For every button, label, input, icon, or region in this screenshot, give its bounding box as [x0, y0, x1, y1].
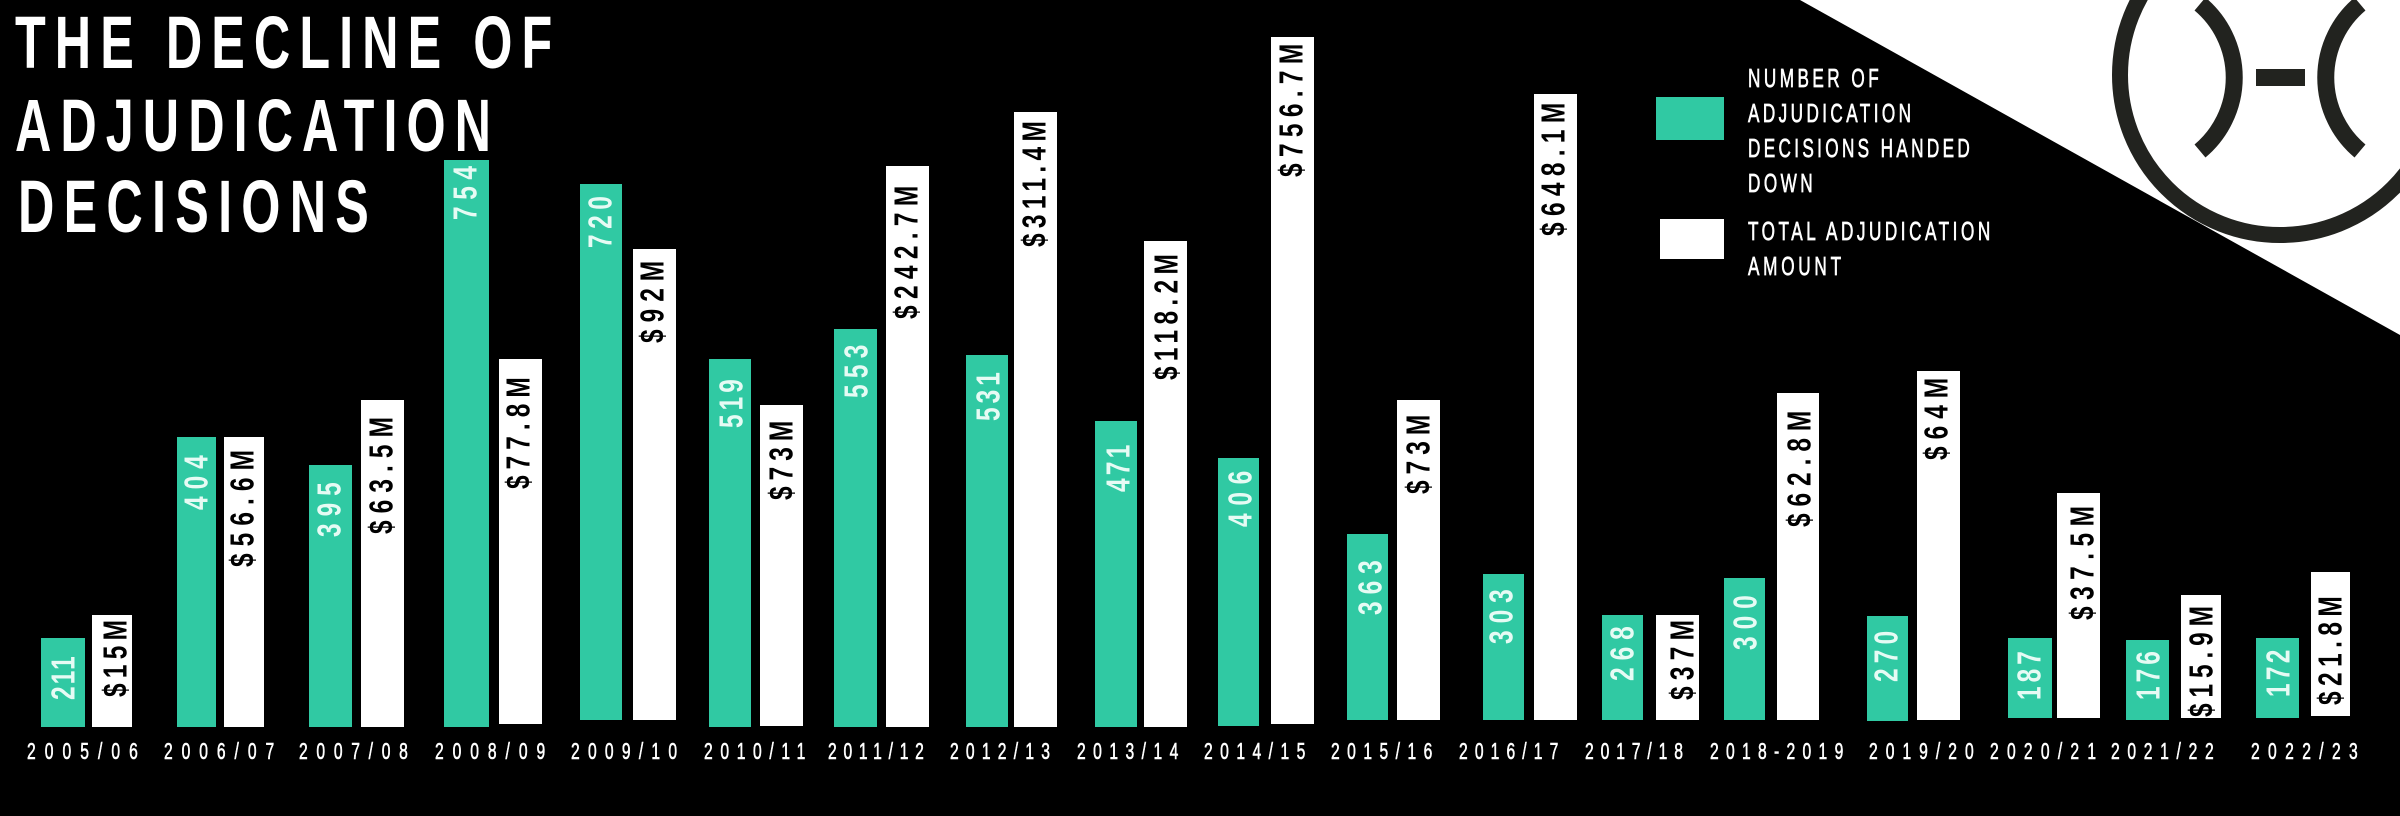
amount bar: $648.1M [1534, 94, 1577, 720]
year label: 2017/18 [1585, 739, 1683, 765]
year label: 2021/22 [2111, 739, 2214, 765]
decisions bar: 172: 172 [2261, 650, 2297, 697]
amount bar: $756.7M: $756.7M [1274, 44, 1310, 177]
year label: 2013/14 [1077, 739, 1178, 765]
year label: 2005/06 [27, 739, 138, 765]
amount bar: $73M [760, 405, 803, 726]
decisions bar: 471 [1095, 421, 1137, 727]
decisions bar: 187: 187 [2012, 651, 2048, 700]
year label: 2006/07 [164, 739, 274, 765]
title: DECISIONS [18, 167, 369, 248]
year group: 2015/16 [1331, 400, 1440, 765]
amount bar: $73M: $73M [764, 421, 800, 500]
amount bar: $64M [1917, 371, 1960, 720]
decisions bar: 406: 406 [1223, 471, 1259, 527]
amount bar: $63.5M: $63.5M [364, 417, 400, 534]
decisions bar: 720 [580, 184, 622, 720]
amount bar: $756.7M [1271, 37, 1314, 724]
title: ADJUDICATION [15, 86, 491, 167]
decisions bar: 300: 300 [1728, 595, 1764, 650]
decisions bar: 404: 404 [179, 455, 215, 510]
amount bar: $242.7M [886, 166, 929, 727]
decisions bar: 404 [177, 437, 216, 727]
decisions bar: 363 [1347, 534, 1389, 720]
year group: 2019/20 [1867, 371, 1974, 765]
amount bar: $62.8M: $62.8M [1782, 411, 1818, 527]
year group: 2007/08 [299, 400, 408, 765]
year label: 2014/15 [1204, 739, 1305, 765]
year label: 2012/13 [950, 739, 1050, 765]
year label: 2018-2019 [1710, 739, 1843, 765]
title: THE DECLINE OF [15, 3, 552, 84]
year label: 2007/08 [299, 739, 408, 765]
decisions bar: 471: 471 [1101, 445, 1137, 492]
year group: 2020/21 [1990, 493, 2101, 765]
legend item: total amount [1660, 216, 1990, 281]
year label: 2009/10 [571, 739, 677, 765]
decisions bar: 553: 553 [839, 345, 875, 398]
amount bar: $118.2M: $118.2M [1149, 254, 1185, 380]
decisions bar: 303 [1483, 574, 1524, 720]
amount bar: $56.6M [224, 437, 264, 727]
decisions bar: 211 [41, 638, 85, 727]
amount bar: $311.4M: $311.4M [1017, 121, 1053, 247]
amount bar: $64M: $64M [1919, 378, 1955, 460]
year label: 2010/11 [704, 739, 805, 765]
decisions bar: 176 [2126, 640, 2169, 720]
amount bar: $77.8M: $77.8M [501, 377, 537, 489]
amount bar: $15M: $15M [98, 620, 134, 697]
amount bar: $21.8M: $21.8M [2313, 596, 2349, 705]
amount bar: $92M [633, 249, 676, 720]
amount bar: $62.8M [1777, 393, 1819, 720]
decisions bar: 531: 531 [971, 372, 1007, 421]
amount bar: $77.8M [499, 359, 542, 724]
decisions bar: 270 [1867, 616, 1908, 721]
title [15, 3, 552, 248]
year group: 2010/11 [704, 359, 805, 765]
decisions bar: 172 [2256, 638, 2299, 718]
year label: 2022/23 [2251, 739, 2358, 765]
year group: 2012/13 [950, 112, 1057, 765]
amount bar: $63.5M [361, 400, 404, 727]
legend item: number of decisions: DECISIONS HANDED [1748, 133, 1970, 163]
decisions bar: 303: 303 [1484, 589, 1520, 644]
legend [1656, 63, 1990, 281]
amount bar: $311.4M [1014, 112, 1057, 727]
decisions bar: 720: 720 [583, 196, 619, 248]
decisions bar: 395 [309, 465, 352, 727]
amount bar: $73M [1397, 400, 1440, 720]
decisions bar: 395: 395 [312, 482, 348, 537]
year label: 2016/17 [1459, 739, 1558, 765]
year group: 2011/12 [828, 166, 929, 765]
year label: 2015/16 [1331, 739, 1432, 765]
legend item: number of decisions: DOWN [1748, 168, 1813, 198]
amount bar: $92M: $92M [635, 261, 671, 343]
decisions bar: 176: 176 [2131, 651, 2167, 700]
amount bar: $37.5M [2057, 493, 2101, 718]
year label: 2011/12 [828, 739, 924, 765]
decisions bar: 754 [444, 160, 489, 727]
amount bar: $73M: $73M [1401, 415, 1437, 494]
decisions bar: 268: 268 [1605, 626, 1641, 681]
decisions bar: 531 [966, 355, 1008, 727]
legend item: number of decisions [1656, 63, 1970, 198]
corner panel with logo [1800, 0, 2400, 335]
year group: 2022/23 [2251, 572, 2358, 765]
year group: 2014/15 [1204, 37, 1314, 765]
amount bar: $118.2M [1144, 241, 1187, 727]
amount bar: $37M: $37M [1665, 620, 1701, 700]
year group: 2017/18 [1585, 615, 1701, 765]
decisions bar: 754: 754 [448, 166, 484, 220]
year group: 2005/06 [27, 615, 138, 765]
decisions bar: 268 [1602, 615, 1643, 720]
amount bar: $648.1M: $648.1M [1536, 103, 1572, 236]
decisions bar: 519 [709, 359, 751, 727]
decisions bar: 553 [834, 329, 877, 727]
year label: 2008/09 [435, 739, 545, 765]
amount bar: $37M [1656, 615, 1701, 720]
year group: 2021/22 [2111, 595, 2221, 765]
amount bar: $15M [92, 615, 134, 727]
legend item: total amount: TOTAL ADJUDICATION [1748, 216, 1990, 246]
legend item: number of decisions: ADJUDICATION [1748, 98, 1911, 128]
amount bar: $242.7M: $242.7M [889, 186, 925, 319]
legend item: total amount: AMOUNT [1748, 251, 1841, 281]
year group: 2013/14 [1077, 241, 1187, 765]
amount bar: $15.9M: $15.9M [2184, 606, 2220, 717]
year group: 2016/17 [1459, 94, 1577, 765]
decisions bar: 406 [1218, 458, 1259, 726]
year group: 2018-2019 [1710, 393, 1843, 765]
year group: 2006/07 [164, 437, 274, 765]
decisions bar: 300 [1724, 578, 1765, 720]
icon: logo [2120, 0, 2400, 235]
legend item: number of decisions: NUMBER OF [1748, 63, 1879, 93]
year group: 2008/09 [435, 160, 545, 765]
decisions bar: 211: 211 [46, 656, 82, 700]
amount bar: $37.5M: $37.5M [2065, 506, 2101, 620]
year label: 2020/21 [1990, 739, 2096, 765]
year group: 2009/10 [571, 184, 677, 765]
decisions bar: 187 [2008, 638, 2052, 718]
decisions bar: 519: 519 [714, 379, 750, 428]
year label: 2019/20 [1869, 739, 1974, 765]
decisions bar: 270: 270 [1869, 631, 1905, 682]
decisions bar: 363: 363 [1353, 560, 1389, 615]
amount bar: $56.6M: $56.6M [225, 450, 261, 567]
